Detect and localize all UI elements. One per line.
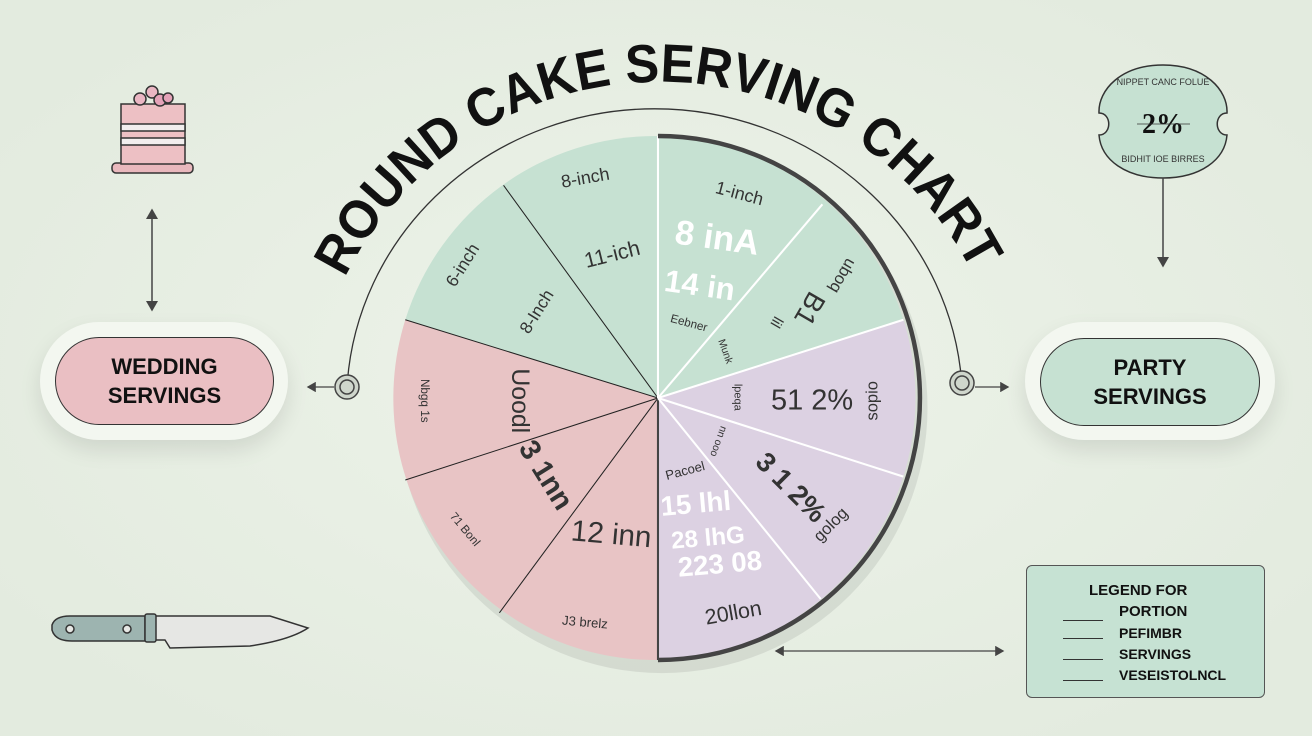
arrow: badge to party (1162, 178, 1164, 266)
pie chart: 3 1nn (512, 435, 579, 516)
legend: VESEISTOLNCL (1119, 667, 1226, 683)
badge: 2% (1142, 109, 1184, 140)
wedding pill (55, 337, 274, 425)
pie chart: Eebner (669, 312, 709, 334)
icon: cake (112, 86, 193, 173)
connector left (308, 375, 359, 399)
legend: PORTION (1119, 603, 1187, 620)
pie chart: Pacoel (664, 458, 706, 483)
arrow: cake to wedding (151, 210, 153, 310)
panel: party servings (1025, 322, 1275, 440)
legend: SERVINGS (1119, 646, 1191, 662)
pie chart: J3 brelz (561, 613, 608, 632)
pie chart: 6-inch (441, 240, 483, 290)
wedding pill: WEDDING (111, 354, 218, 379)
pie chart: uboq (825, 255, 860, 297)
pie chart: 223 08 (677, 545, 763, 583)
pie chart (393, 136, 928, 673)
pie chart: 51 2% (771, 384, 853, 416)
pie chart: 11-ich (582, 236, 643, 273)
panel: wedding servings (40, 322, 288, 440)
pie chart: lil (766, 313, 786, 331)
pie chart: sopio (863, 381, 882, 421)
pie chart: 8-inch (559, 164, 611, 192)
pie chart: 20llon (703, 596, 763, 630)
pie chart: 14 in (662, 263, 737, 307)
pie chart: 15 lhl (659, 485, 732, 522)
badge (1099, 65, 1227, 178)
pie chart: 8 inA (673, 214, 761, 263)
arrow: bottom double (776, 650, 1003, 652)
party pill (1040, 338, 1260, 426)
pie chart: B1 (788, 287, 832, 331)
pie chart: lpeqa (732, 384, 744, 412)
pie chart: Uoodl (506, 368, 533, 433)
pie chart: 12 inn (570, 514, 653, 554)
icon: knife (52, 614, 308, 648)
connector right (950, 371, 1008, 395)
party pill: SERVINGS (1093, 384, 1207, 409)
pie chart: ooo uu (708, 424, 729, 458)
badge: NIPPET CANC FOLUE (1117, 77, 1209, 87)
pie chart: Nbgq 1s (418, 379, 431, 423)
pie chart: 3 1 2% (750, 446, 832, 528)
pie chart: 8-Inch (515, 286, 558, 337)
title: ROUND CAKE SERVING CHART (314, 44, 1004, 275)
pie chart: golog (810, 503, 852, 545)
badge: BIDHIT IOE BIRRES (1121, 154, 1205, 164)
thin arc (347, 109, 962, 387)
pie chart: 71 Bonl (447, 510, 483, 549)
legend: LEGEND FOR (1089, 582, 1187, 599)
wedding pill: SERVINGS (108, 383, 221, 408)
legend: PEFIMBR (1119, 625, 1182, 641)
pie chart: Munk (715, 338, 735, 366)
pie chart: 1-inch (713, 177, 766, 209)
party pill: PARTY (1114, 355, 1186, 380)
pie chart: 28 lhG (670, 521, 746, 555)
legend (1026, 565, 1265, 698)
